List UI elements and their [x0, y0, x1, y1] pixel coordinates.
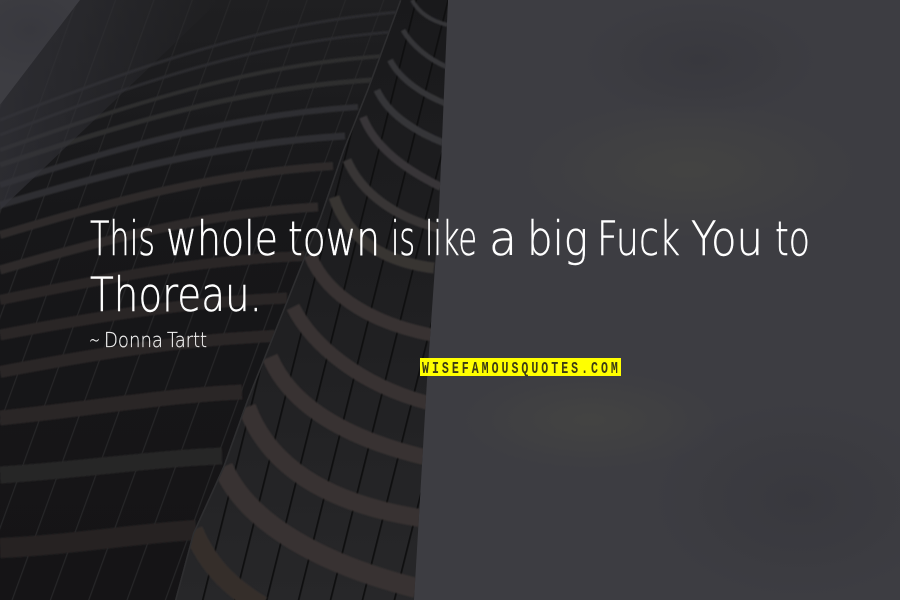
- author attribution: [89, 328, 207, 352]
- quote line 1: like: [425, 212, 477, 267]
- quote line 1: Fuck: [597, 212, 680, 267]
- quote line 1: This: [90, 212, 155, 267]
- quote line 1: a: [489, 212, 517, 267]
- quote line 1: big: [527, 212, 588, 267]
- quote line 1: to: [775, 212, 810, 267]
- building: left haze: [0, 0, 220, 210]
- building: right curved section with bands: [175, 0, 448, 600]
- quote line 1: whole: [166, 212, 278, 267]
- watermark badge: WISEFAMOUSQUOTES.COM: [422, 360, 618, 379]
- quote line 1: You: [691, 212, 763, 267]
- quote line 2: Thoreau.: [90, 268, 262, 323]
- quote line 1: is: [391, 212, 415, 267]
- author attribution: Donna: [104, 328, 163, 352]
- author attribution: ~: [89, 328, 100, 352]
- quote text: [90, 212, 810, 323]
- building: left curved facade: [0, 0, 400, 600]
- author attribution: Tartt: [167, 328, 207, 352]
- quote line 1: [90, 212, 810, 267]
- quote line 1: town: [288, 212, 380, 267]
